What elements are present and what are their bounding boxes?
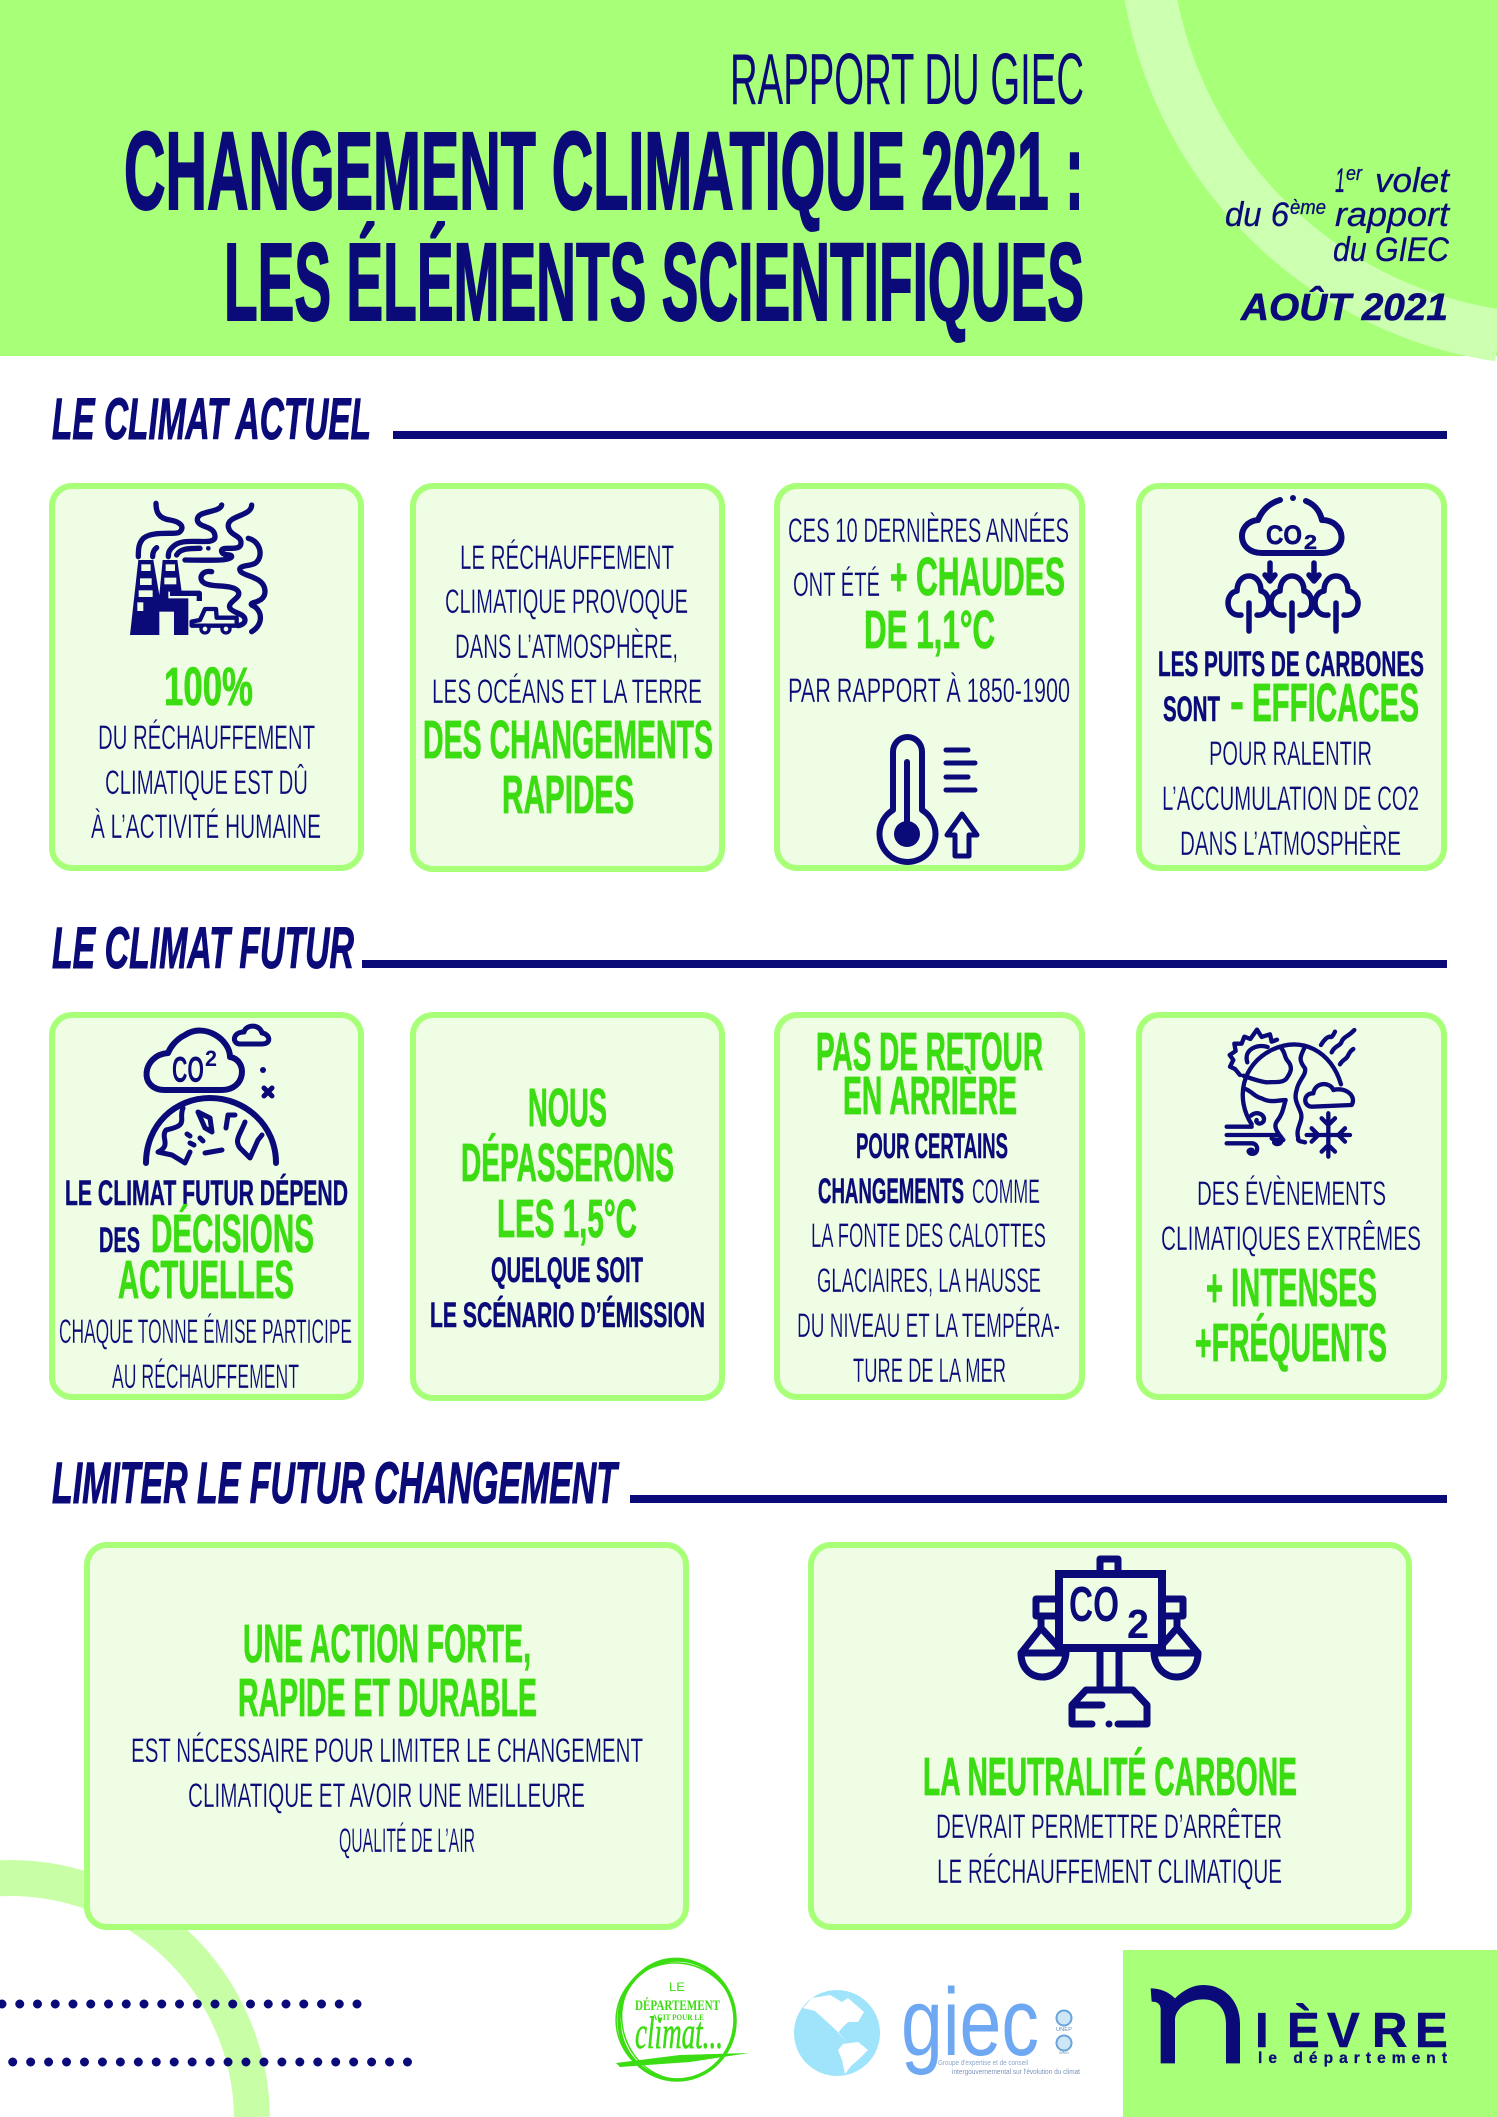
card text: SONT	[1163, 689, 1220, 729]
logo: giec: intergouvernemental sur l'évolution du climat	[952, 2069, 1080, 2076]
card text: LES 1,5°C	[497, 1189, 637, 1249]
card text	[430, 1078, 705, 1335]
card text: RAPIDE ET DURABLE	[238, 1668, 537, 1728]
panel: pas de retour en arrière	[777, 1015, 1082, 1397]
card text: TURE DE LA MER	[853, 1352, 1006, 1390]
card text: DÉCISIONS	[151, 1204, 314, 1264]
heading: le climat futur	[52, 916, 1447, 981]
card text: UNE ACTION FORTE,	[243, 1614, 531, 1674]
panel: puits de carbone	[1139, 486, 1444, 868]
icon: co2 cloud over globe: 2	[205, 1046, 217, 1071]
card text: DU NIVEAU ET LA TEMPÉRA-	[797, 1306, 1060, 1345]
panel: dépasserons 1,5°C	[413, 1015, 722, 1398]
card text: QUALITÉ DE L’AIR	[339, 1821, 475, 1860]
panel: neutralité carbone	[811, 1545, 1409, 1927]
card text	[59, 1173, 352, 1396]
icon: co2 cloud over globe: CO	[172, 1049, 204, 1090]
card text	[788, 511, 1070, 710]
card text: DÉPASSERONS	[461, 1133, 674, 1193]
title	[124, 110, 1084, 344]
panel: action forte	[87, 1545, 686, 1927]
panel: évènements extrêmes	[1139, 1015, 1444, 1397]
card text: AU RÉCHAUFFEMENT	[112, 1357, 299, 1396]
report note: du GIEC	[1333, 231, 1449, 269]
card text: CLIMATIQUE PROVOQUE	[445, 583, 688, 621]
logo: giec: WMO	[1059, 2050, 1069, 2055]
report note: volet	[1375, 162, 1451, 200]
card text: LA FONTE DES CALOTTES	[811, 1217, 1046, 1255]
card text: LE CLIMAT FUTUR DÉPEND	[65, 1173, 348, 1213]
icon: co2 cloud over trees	[1228, 495, 1358, 631]
logo: giec	[794, 1969, 1080, 2076]
icon: co2 cloud over trees: 2	[1304, 532, 1317, 554]
card text	[91, 657, 321, 846]
card text: CHAQUE TONNE ÉMISE PARTICIPE	[59, 1312, 352, 1351]
card text: ACTUELLES	[118, 1250, 294, 1310]
card text: + CHAUDES	[890, 547, 1065, 607]
card text: PAS DE RETOUR	[816, 1022, 1043, 1082]
supertitle: RAPPORT DU GIEC	[730, 40, 1084, 120]
logo: le département agit pour le climat	[605, 1946, 749, 2092]
logo: giec: UNEP	[1056, 2027, 1073, 2033]
card text: DES CHANGEMENTS	[423, 710, 713, 770]
card text: ONT ÉTÉ	[793, 565, 880, 604]
icon: factory and smoke	[130, 503, 265, 635]
card text: GLACIAIRES, LA HAUSSE	[817, 1262, 1041, 1300]
header band	[0, 0, 1497, 356]
card text: COMME	[972, 1173, 1040, 1211]
card text: POUR CERTAINS	[856, 1126, 1008, 1166]
panel: décisions actuelles	[52, 1015, 361, 1397]
logo: le département agit pour le climat: DÉPARTEMENT	[635, 1997, 720, 2014]
card text	[1158, 644, 1424, 863]
report note: rapport	[1335, 196, 1451, 234]
card text	[423, 538, 713, 825]
icon: globe with extreme weather	[1227, 1030, 1354, 1157]
decorative arc bottom left	[0, 1878, 252, 2117]
report note: ème	[1290, 197, 1326, 219]
card text: À L’ACTIVITÉ HUMAINE	[91, 807, 321, 846]
heading: le climat futur: LE CLIMAT FUTUR	[52, 916, 354, 981]
card text: DES	[99, 1220, 140, 1260]
card text: LES OCÉANS ET LA TERRE	[432, 672, 702, 711]
card text: PAR RAPPORT À 1850-1900	[788, 671, 1070, 710]
logo: le département agit pour le climat: climat...	[635, 2007, 723, 2058]
icon: thermometer	[880, 737, 977, 862]
report note: du 6	[1225, 196, 1289, 234]
report note: er	[1346, 163, 1363, 185]
card text	[923, 1747, 1297, 1891]
card text: QUELQUE SOIT	[491, 1250, 643, 1290]
card text: DANS L’ATMOSPHÈRE,	[455, 627, 678, 666]
card text: LE RÉCHAUFFEMENT	[460, 538, 674, 577]
card text: EN ARRIÈRE	[843, 1066, 1017, 1126]
card text	[1161, 1174, 1421, 1373]
report note: 1	[1335, 162, 1345, 200]
card text: EST NÉCESSAIRE POUR LIMITER LE CHANGEMENT	[131, 1731, 643, 1770]
icon: co2 balance: 2	[1127, 1601, 1149, 1647]
heading: le climat actuel	[52, 387, 1447, 452]
heading: limiter le futur changement: LIMITER LE FUTUR CHANGEMENT	[52, 1451, 620, 1516]
logo: giec: Groupe d'expertise et de conseil	[938, 2060, 1028, 2067]
icon: co2 balance	[1021, 1559, 1198, 1728]
card text: 100%	[164, 657, 253, 717]
dotted lines	[2, 2004, 408, 2062]
card text: DEVRAIT PERMETTRE D’ARRÊTER	[936, 1807, 1282, 1846]
logo: giec: giec	[901, 1969, 1039, 2076]
logo: nièvre le département: IÈVRE	[1255, 2004, 1448, 2058]
panel: 100% activité humaine	[52, 486, 361, 868]
heading: limiter le futur changement	[52, 1451, 1447, 1516]
card text	[797, 1022, 1060, 1390]
card text: RAPIDES	[502, 765, 634, 825]
report note	[1225, 162, 1451, 269]
card text: CLIMATIQUE ET AVOIR UNE MEILLEURE	[188, 1777, 585, 1815]
panel: + chaudes de 1,1°C	[777, 486, 1082, 868]
logo: nièvre le département	[1123, 1950, 1497, 2117]
logo: nièvre le département: le département	[1258, 2050, 1447, 2067]
card text: -	[1230, 672, 1244, 732]
panel: changements rapides	[413, 486, 722, 869]
card text: POUR RALENTIR	[1209, 735, 1372, 773]
icon: co2 cloud over globe	[146, 1026, 276, 1163]
icon: co2 balance: CO	[1069, 1578, 1119, 1632]
card text	[131, 1614, 643, 1860]
card text: DU RÉCHAUFFEMENT	[98, 718, 315, 757]
date: AOÛT 2021	[1240, 284, 1448, 329]
card text: DE 1,1°C	[864, 600, 995, 660]
card text: LE SCÉNARIO D’ÉMISSION	[430, 1295, 705, 1335]
card text: CLIMATIQUE EST DÛ	[105, 763, 308, 802]
card text: CHANGEMENTS	[818, 1171, 964, 1211]
card text: NOUS	[528, 1078, 607, 1138]
logo: le département agit pour le climat: LE	[669, 1980, 685, 1994]
logo: le département agit pour le climat: AGIT POUR LE	[652, 2012, 704, 2022]
icon: co2 cloud over trees: CO	[1266, 520, 1302, 550]
heading: le climat actuel: LE CLIMAT ACTUEL	[52, 387, 371, 452]
card text: CES 10 DERNIÈRES ANNÉES	[788, 511, 1069, 550]
